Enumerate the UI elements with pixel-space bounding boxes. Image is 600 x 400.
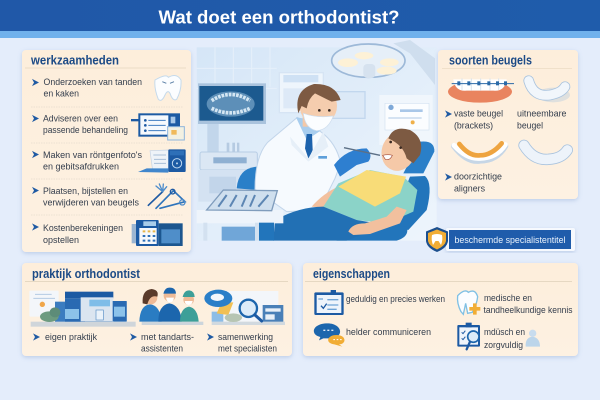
label: samenwerking met specialisten: met specialisten	[218, 344, 277, 354]
item: adviseren: passende behandeling	[43, 125, 128, 136]
item: plaatsen	[32, 184, 185, 208]
trait: medische en tandheelkundige kennis	[457, 291, 573, 315]
label: eigen praktijk: eigen praktijk	[45, 332, 97, 342]
heading: eigenschappen: eigenschappen	[313, 267, 390, 281]
item: maken	[32, 149, 186, 173]
label: doorzichtige aligners: doorzichtige	[454, 172, 502, 182]
trait: geduldig en precies werken: geduldig en precies werken	[346, 294, 445, 304]
item: maken: Maken van röntgenfoto's	[43, 150, 142, 161]
label: met tandartsassistenten: met tandarts-	[141, 332, 194, 342]
instrument tray	[197, 190, 283, 241]
wall tiles	[197, 47, 277, 88]
label: met tandartsassistenten: assistenten	[141, 344, 183, 354]
panel: eigenschappen	[303, 263, 578, 356]
dental unit	[198, 143, 257, 202]
label: uitneembare beugel: uitneembare	[517, 108, 566, 118]
X-ray monitor	[198, 83, 266, 152]
title banner	[0, 0, 600, 38]
badge: beschermde specialistentitel: beschermde specialistentitel	[454, 234, 566, 245]
label: doorzichtige aligners	[445, 172, 502, 194]
icon: clinic building	[29, 291, 136, 327]
item: plaatsen: verwijderen van beugels	[43, 198, 139, 208]
item: adviseren: Adviseren over een	[43, 114, 118, 124]
dental chair	[237, 141, 434, 241]
label: uitneembare beugel: beugel	[517, 120, 543, 130]
panel: werkzaamheden	[22, 50, 191, 252]
trait: mdüsch en zorgvuldig: mdüsch en	[484, 327, 525, 337]
heading: praktijk orthodontist: praktijk orthodontist	[32, 267, 141, 281]
label: doorzichtige aligners: aligners	[454, 184, 485, 194]
icon: team of assistants	[139, 288, 203, 325]
item: adviseren	[32, 113, 184, 140]
label: samenwerking met specialisten: samenwerking	[218, 332, 273, 342]
item: onderzoeken: en kaken	[44, 88, 79, 100]
icon: retainer	[454, 143, 505, 161]
icon: uitneembare beugel	[529, 81, 570, 102]
item: onderzoeken	[32, 76, 181, 100]
label: vaste beugel: (brackets)	[454, 120, 493, 130]
trait: helder communiceren: helder communiceren	[346, 327, 431, 337]
item: maken: en gebitsafdrukken	[43, 162, 119, 172]
label: uitneembare beugel	[517, 108, 566, 130]
icon: collaboration with specialists	[204, 290, 285, 325]
item: kostenberekeningen: opstellen	[43, 235, 79, 246]
item: kostenberekeningen: Kostenberekeningen	[43, 223, 123, 234]
label: vaste beugel	[445, 108, 503, 130]
item: plaatsen: Plaatsen, bijstellen en	[43, 186, 128, 197]
label: samenwerking met specialisten	[207, 332, 277, 354]
title banner: Wat doet een orthodontist?	[158, 8, 400, 28]
icon: aligner	[524, 145, 567, 159]
heading: soorten beugels: soorten beugels	[449, 54, 532, 68]
item: onderzoeken: Onderzoeken van tanden	[44, 77, 142, 88]
trait: mdüsch en zorgvuldig	[457, 323, 540, 350]
trait: geduldig en precies werken	[314, 290, 445, 315]
label: met tandartsassistenten	[130, 332, 194, 354]
label: vaste beugel: vaste beugel	[454, 108, 503, 118]
trait: mdüsch en zorgvuldig: zorgvuldig	[484, 340, 523, 350]
badge: beschermde specialistentitel	[426, 227, 575, 252]
central illustration: orthodontist treating patient	[197, 40, 437, 241]
heading: werkzaamheden: werkzaamheden	[30, 54, 119, 68]
panel: praktijk orthodontist	[22, 263, 292, 356]
panel: soorten beugels	[438, 50, 578, 199]
patient record on wall	[379, 95, 433, 145]
item: kostenberekeningen	[32, 220, 183, 246]
icon: shield with tooth	[426, 227, 448, 252]
trait: helder communiceren	[314, 323, 431, 347]
patient	[273, 129, 421, 241]
operating lamp	[332, 40, 435, 85]
icon: vaste beugel	[448, 78, 514, 103]
trait: medische en tandheelkundige kennis: medische en	[484, 293, 532, 303]
trait: medische en tandheelkundige kennis: tandheelkundige kennis	[484, 305, 573, 315]
wall chart	[279, 73, 365, 118]
orthodontist	[255, 84, 380, 212]
